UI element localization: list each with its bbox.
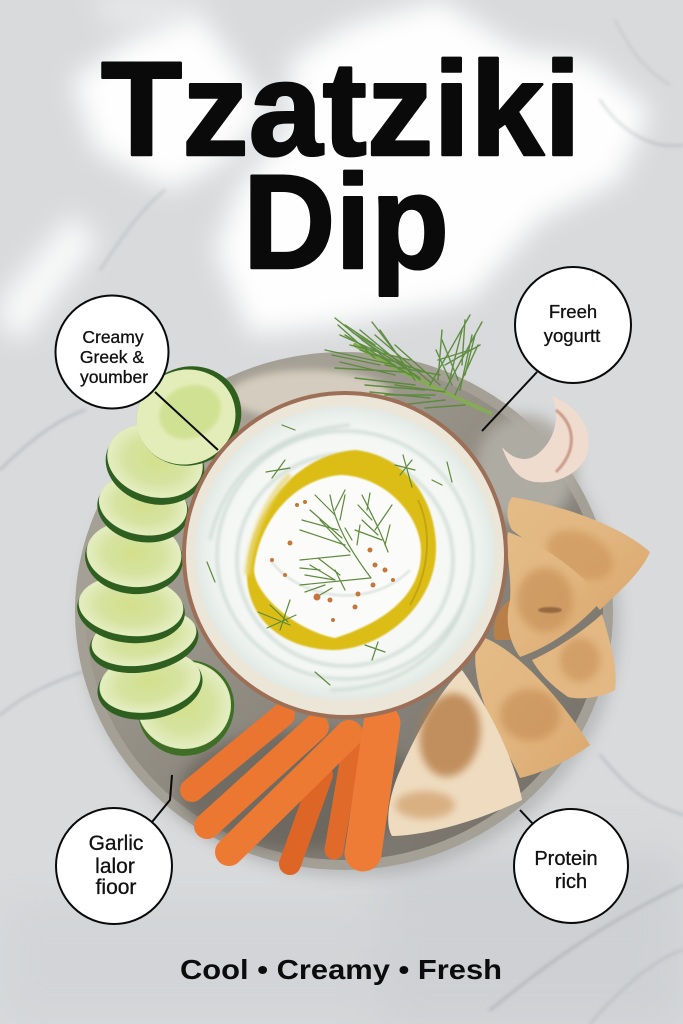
- callout: creamy greek: youmber: [80, 367, 148, 387]
- pita lower wedge: [475, 636, 590, 778]
- callout: fresh yogurt: Freeh: [549, 301, 597, 322]
- chili flakes: [270, 500, 395, 622]
- garlic clove: [502, 396, 589, 482]
- plate: [75, 352, 620, 877]
- pita wedges: [388, 497, 650, 836]
- callout: garlic flavor: fioor: [96, 876, 136, 899]
- callout: fresh yogurt: [482, 267, 631, 431]
- callout: protein rich: [514, 809, 628, 923]
- carrot sticks: [192, 715, 382, 864]
- bowl of tzatziki: [182, 391, 508, 719]
- callout: fresh yogurt: yogurtt: [544, 325, 600, 346]
- title: Tzatziki: [101, 35, 581, 184]
- callout: garlic flavor: lalor: [95, 855, 135, 878]
- dill sprig: [325, 315, 490, 413]
- callout: garlic flavor: [56, 775, 172, 924]
- swirl marks: [210, 425, 473, 690]
- callout: protein rich: rich: [555, 871, 587, 893]
- title: Dip: [243, 148, 449, 297]
- title: [101, 35, 581, 297]
- pita middle wedge: [507, 532, 602, 657]
- callout: protein rich: Protein: [534, 848, 598, 870]
- pita back wedge: [508, 497, 650, 610]
- cucumber slices: [74, 349, 258, 776]
- pita front wedge: [388, 670, 522, 836]
- callout: creamy greek: Greek &: [80, 347, 144, 367]
- pita small wedge: [532, 614, 616, 698]
- dill garnish: [207, 425, 452, 685]
- callout: creamy greek: Creamy: [82, 327, 144, 347]
- callout: garlic flavor: Garlic: [89, 832, 143, 855]
- yogurt mound: [254, 475, 421, 638]
- olive oil ring: [247, 450, 436, 650]
- tagline: Cool • Creamy • Fresh: [180, 954, 502, 985]
- callout: creamy greek: [56, 296, 218, 450]
